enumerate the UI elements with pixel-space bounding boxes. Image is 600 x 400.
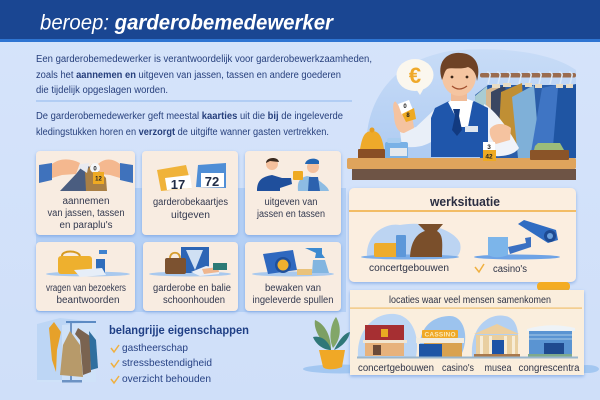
attendant — [393, 53, 519, 157]
card: bewaken: bewaken van — [265, 283, 321, 294]
card: garderobekaartjes — [142, 151, 238, 235]
counter ticket: 42 — [485, 154, 493, 160]
label: casino's — [493, 264, 527, 275]
card: garderobekaartjes: uitgeven — [171, 210, 210, 221]
heading: locaties waar veel mensen samenkomen — [389, 295, 551, 306]
raised ticket: 8 — [406, 113, 410, 119]
counter ticket: 3 — [487, 144, 491, 151]
ticket jar — [385, 138, 408, 160]
icon: bag and coat — [361, 224, 461, 260]
raised ticket — [398, 100, 416, 122]
intro text block: Een garderobemedewerker is verantwoordelijk voor garderobewerkzaamheden, — [36, 54, 372, 65]
card: aannemen: 12 — [95, 176, 102, 182]
title banner — [0, 0, 600, 42]
location labels — [358, 363, 580, 374]
card: aannemen — [36, 151, 135, 235]
intro text block — [36, 54, 372, 138]
counter ticket — [483, 142, 496, 161]
card: bewaken: ingeleverde spullen — [252, 295, 334, 306]
card: aannemen: 0 — [93, 166, 97, 172]
clothes rail with garments — [475, 72, 576, 158]
intro text block: die tijdelijk opgeslagen worden. — [36, 85, 168, 96]
golden bell — [358, 128, 385, 159]
card: uitgeven: uitgeven van — [264, 197, 318, 208]
location labels: musea — [484, 363, 512, 374]
title: beroep: garderobemedewerker — [40, 12, 335, 34]
location labels: congrescentra — [518, 363, 580, 374]
card: aannemen: aannemen — [62, 196, 110, 207]
check list — [111, 342, 212, 385]
check — [475, 264, 484, 272]
location labels: concertgebouwen — [358, 363, 434, 374]
card: uitgeven — [245, 151, 341, 235]
illustration: cloakroom attendant at counter — [347, 49, 576, 180]
check list: overzicht behouden — [122, 373, 211, 385]
heading: werksituatie — [429, 195, 500, 209]
icon: coat rack with umbrella — [37, 318, 98, 382]
icon: congrescentrum — [527, 325, 575, 357]
icon: camera and cup — [474, 220, 560, 260]
card: aannemen: en paraplu's — [60, 220, 112, 231]
check list: gastheerschap — [122, 342, 188, 354]
card: vragen: vragen van bezoekers — [46, 283, 126, 294]
card: garderobekaartjes: garderobekaartjes — [153, 197, 228, 208]
intro text block: De garderobemedewerker geft meestal kaarties uit die bij de ingeleverde — [36, 111, 343, 122]
card: vragen: beantwoorden — [56, 295, 120, 306]
counter — [347, 158, 576, 180]
raised ticket: 0 — [403, 104, 407, 110]
check list: stressbestendigheid — [122, 357, 212, 369]
icon: casino — [416, 316, 465, 357]
card: garderobe en balie: garderobe en balie — [153, 283, 231, 294]
speech bubble with euro sign: € — [409, 63, 421, 88]
panel: locaties — [350, 290, 584, 375]
card: vragen — [36, 242, 135, 311]
icon: museum — [472, 316, 520, 357]
intro text block: zoals het aannemen en uitgeven van jassen, tassen en andere goederen — [36, 70, 341, 81]
speech bubble with euro sign — [396, 59, 434, 95]
card: uitgeven: jassen en tassen — [256, 209, 325, 220]
activity cards — [36, 151, 341, 311]
card: bewaken — [245, 242, 341, 311]
intro text block: kledingstukken horen en verzorgt de uitgifte wanner gasten vertrekken. — [36, 127, 329, 138]
icon: potted plant — [303, 317, 599, 374]
card: garderobekaartjes: 17 — [171, 177, 185, 192]
icon: casino: CASSINO — [424, 332, 456, 338]
label: concertgebouwen — [369, 263, 449, 274]
location labels: casino's — [442, 363, 474, 374]
key qualities — [109, 323, 249, 385]
card: aannemen: van jassen, tassen — [48, 208, 124, 219]
card: garderobekaartjes: 72 — [205, 174, 219, 189]
panel: werksituatie — [349, 188, 576, 291]
card: garderobe en balie: schoonhouden — [163, 295, 225, 306]
icon: concertgebouw — [358, 314, 417, 357]
tray with banknotes — [530, 143, 569, 160]
heading: belangrijje eigenschappen — [109, 323, 249, 337]
card: garderobe en balie — [143, 242, 238, 311]
